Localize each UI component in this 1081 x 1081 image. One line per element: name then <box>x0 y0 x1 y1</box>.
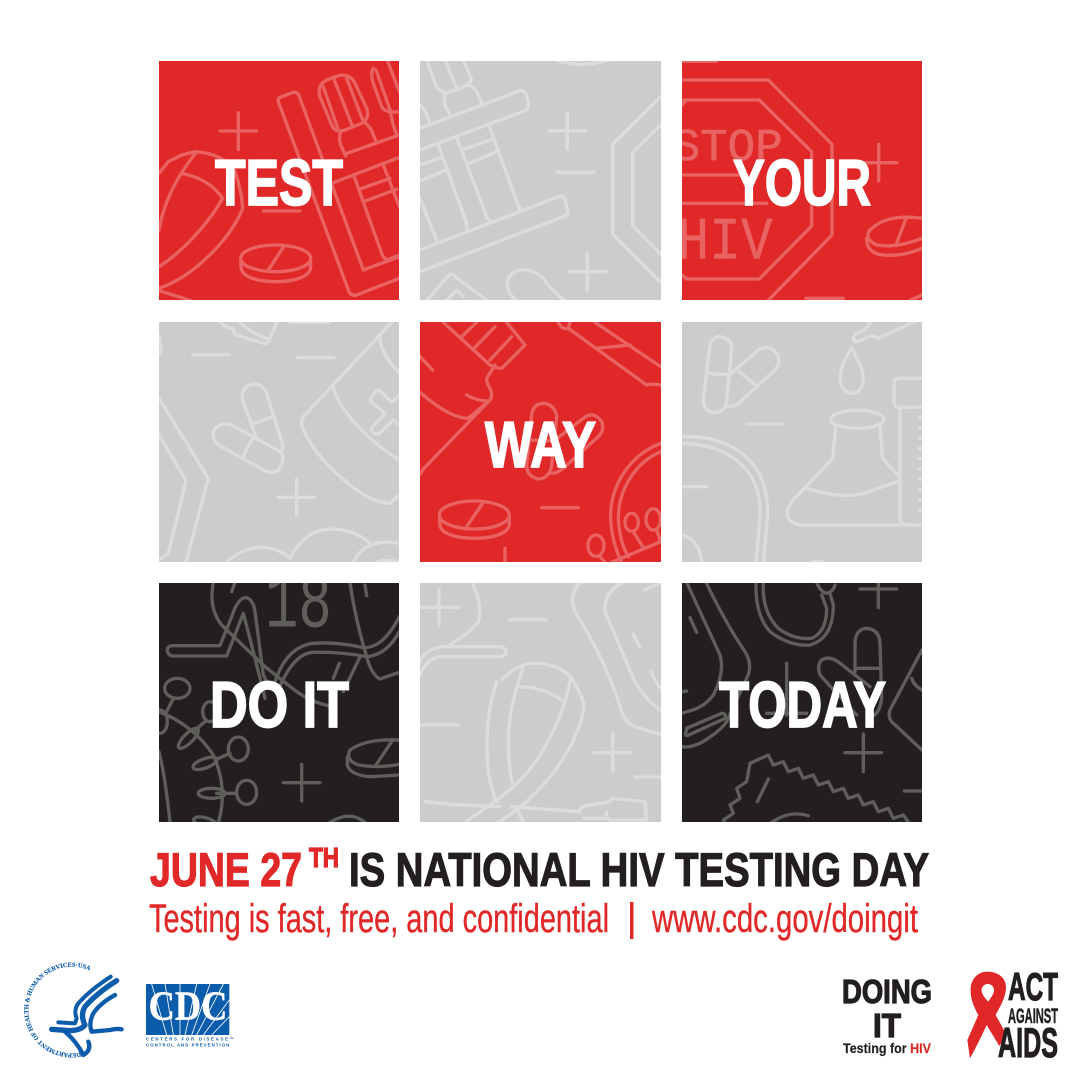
logo: CDC <box>146 983 234 1047</box>
subheading: testing details and URL: www.cdc.gov/doingit <box>651 897 918 941</box>
panel: grey tile with flask <box>682 318 922 563</box>
panel: TEST tile <box>159 60 399 300</box>
logo: Department of Health and Human Services: DEPARTMENT OF HEALTH & HUMAN SERVICES·USA <box>24 962 90 1058</box>
panel: DO IT tile <box>159 583 399 822</box>
panel: TODAY tile <box>682 582 922 822</box>
headline: June 27th is National HIV Testing Day: IS NATIONAL HIV TESTING DAY <box>349 843 929 896</box>
icons: pills, bandage, chevron and cloud <box>159 322 399 562</box>
headline: June 27th is National HIV Testing Day <box>150 842 929 896</box>
logo: Doing It, Testing for HIV <box>842 973 932 1056</box>
logo: Department of Health and Human Services <box>24 962 124 1058</box>
logo: CDC: CONTROL AND PREVENTION <box>146 1042 229 1047</box>
icons: test tube rack, ribbon and pill <box>159 60 399 300</box>
logo: CDC: CENTERS FOR DISEASE™ <box>146 1037 234 1042</box>
icon: red ribbon <box>967 972 1007 1058</box>
subheading: testing details and URL: Testing is fast, free, and confidential <box>149 897 609 941</box>
icons: stethoscope, pills and bandage edge <box>682 582 922 822</box>
icons: stop HIV sign and pill: HIV <box>677 209 773 277</box>
heading: DO IT: DO IT <box>210 668 349 741</box>
logo: Doing It, Testing for HIV: DOING <box>842 973 932 1010</box>
icons: heartbeat line, virus and pill: 18 <box>265 561 332 652</box>
icons: stop HIV sign and pill: STOP <box>673 122 783 174</box>
logo: CDC: CDC <box>149 983 227 1029</box>
logo: Doing It, Testing for HIV: IT <box>873 1007 901 1044</box>
panel: WAY tile <box>420 322 661 562</box>
headline: June 27th is National HIV Testing Day: TH <box>309 842 339 873</box>
logo: Doing It, Testing for HIV: Testing for HIV <box>843 1040 932 1056</box>
icons: pills, drop, flask and test tube <box>682 318 922 563</box>
icons: test tube rack and octagon <box>420 60 661 300</box>
icons: dropper, pills, pill and petri dish <box>420 322 661 562</box>
icons: stop HIV sign and pill <box>673 61 922 300</box>
heading: WAY: WAY <box>485 408 596 481</box>
icons: ribbon, syringe and bandage outline <box>420 582 661 823</box>
panel: grey tile with rack and octagon <box>420 60 661 300</box>
icons: heartbeat line, virus and pill <box>159 583 399 822</box>
heading: YOUR: YOUR <box>733 146 871 219</box>
logo: Act Against AIDS with red ribbon <box>967 966 1058 1066</box>
text: Act Against AIDS <box>998 966 1058 1066</box>
heading: TEST: TEST <box>215 146 343 219</box>
headline: June 27th is National HIV Testing Day: JUNE 27 <box>150 843 302 896</box>
heading: TODAY: TODAY <box>719 668 886 741</box>
panel: grey tile with pills and bandage <box>159 322 399 562</box>
panel: grey tile with ribbon <box>420 582 661 823</box>
panel: YOUR tile <box>673 61 922 300</box>
